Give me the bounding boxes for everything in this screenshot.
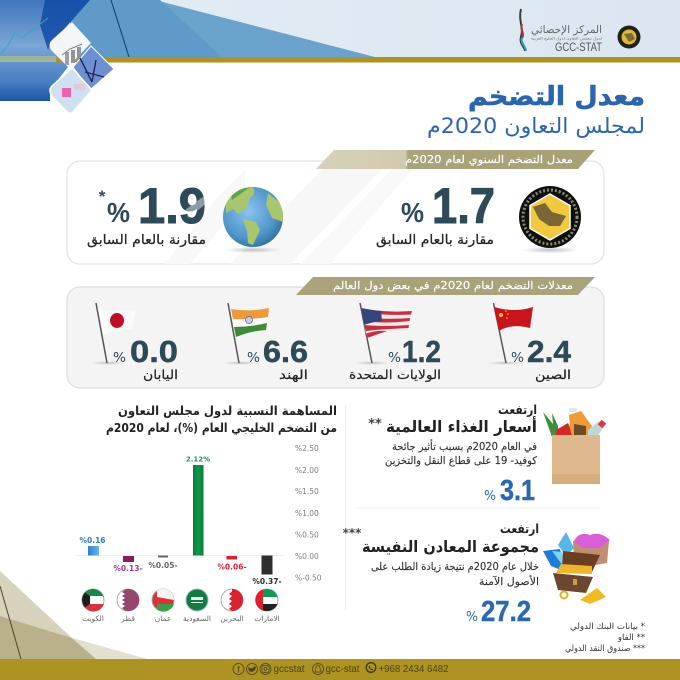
USA name: الولايات المتحدة bbox=[349, 367, 441, 383]
icon: grocery bag bbox=[543, 408, 606, 484]
icon: facebook: f bbox=[237, 664, 240, 674]
food heading: أسعار الغذاء العالمية bbox=[386, 416, 537, 436]
icon: Japan flag bbox=[91, 303, 136, 365]
world value bbox=[87, 178, 207, 248]
ribbon text: معدل التضخم السنوي لعام 2020م bbox=[405, 154, 573, 166]
logo: GCC-STAT bbox=[520, 9, 603, 54]
food intro: ارتفعت bbox=[498, 402, 537, 417]
USA percent: % bbox=[388, 351, 401, 366]
metals asterisks: *** bbox=[343, 526, 362, 540]
y axis labels: %0.50 bbox=[295, 530, 319, 540]
icon: treasure chest bbox=[543, 532, 610, 604]
world caption: مقارنة بالعام السابق bbox=[87, 233, 206, 248]
China number: 2.4 bbox=[527, 334, 572, 369]
icon: whatsapp bbox=[366, 663, 376, 672]
logo subtitle: لدول مجلس التعاون لدول الخليج العربية bbox=[531, 36, 602, 40]
y axis labels: %2.50 bbox=[295, 444, 319, 453]
bar: UAE: %0.37- bbox=[252, 577, 282, 586]
icon: globe bbox=[223, 186, 283, 253]
India name: الهند bbox=[279, 367, 308, 383]
label Bahrain: البحرين bbox=[220, 614, 244, 623]
icon: facebook bbox=[233, 664, 244, 674]
logo name arabic: المركز الإحصائي bbox=[531, 24, 602, 36]
metals body line 1: خلال عام 2020م نتيجة زيادة الطلب على bbox=[371, 561, 539, 573]
metals number: 27.2 bbox=[481, 596, 531, 628]
Japan bbox=[91, 303, 178, 382]
bar: Oman: %0.05- bbox=[148, 561, 178, 570]
label Oman: عمان bbox=[155, 614, 171, 623]
GCC value bbox=[376, 178, 495, 248]
icon: snapchat bbox=[312, 664, 324, 674]
y axis labels: %1.00 bbox=[295, 509, 319, 518]
panel: world rates bbox=[67, 277, 604, 388]
chart title line 2: من التضخم الخليجي العام (%)، لعام 2020م bbox=[106, 420, 337, 436]
y axis labels bbox=[295, 444, 322, 582]
ribbon: world heading bbox=[296, 277, 595, 295]
logo latin name: GCC-STAT bbox=[555, 40, 603, 54]
bar: Oman bbox=[148, 556, 178, 570]
label Saudi: السعودية bbox=[183, 614, 211, 623]
bar: Bahrain: %0.06- bbox=[217, 562, 247, 572]
Japan percent: % bbox=[113, 351, 126, 366]
y axis labels: %-0.50 bbox=[295, 574, 322, 582]
panel: annual inflation bbox=[67, 150, 604, 264]
header banner bbox=[0, 0, 680, 101]
GCC percent: % bbox=[401, 197, 424, 228]
y axis labels: %2.00 bbox=[295, 466, 319, 475]
header diamond tiles bbox=[50, 22, 114, 113]
metals heading: مجموعة المعادن النفيسة bbox=[362, 537, 539, 556]
icon: twitter bbox=[246, 664, 258, 674]
footnotes bbox=[565, 622, 645, 654]
icon: USA flag bbox=[355, 303, 412, 365]
world number: 1.9 bbox=[138, 178, 206, 234]
footer bar bbox=[0, 659, 680, 680]
metals percent: % bbox=[466, 610, 478, 625]
handle gcc-stat: gcc-stat bbox=[326, 664, 360, 675]
flag: Qatar bbox=[117, 589, 139, 623]
USA number: 1.2 bbox=[402, 334, 441, 369]
decorative corner bbox=[0, 571, 147, 659]
flag: UAE bbox=[254, 589, 280, 623]
bar: Qatar: %0.13- bbox=[113, 564, 143, 573]
bar: Bahrain bbox=[217, 556, 247, 572]
flag: Saudi Arabia bbox=[183, 589, 211, 623]
bar: Kuwait bbox=[79, 536, 106, 556]
food number: 3.1 bbox=[500, 475, 535, 507]
India bbox=[223, 303, 308, 383]
panel: precious metals bbox=[343, 521, 610, 628]
flag: Bahrain bbox=[220, 589, 244, 623]
flag: Kuwait bbox=[82, 589, 104, 623]
emblem: GCC small bbox=[618, 26, 640, 48]
China bbox=[488, 303, 572, 383]
label UAE: الامارات bbox=[254, 614, 280, 623]
food asterisks: ** bbox=[368, 417, 382, 432]
panel: food prices bbox=[368, 402, 606, 507]
icon: India flag bbox=[223, 303, 269, 365]
handle gccstat: gccstat bbox=[274, 664, 305, 675]
world percent: % bbox=[107, 197, 130, 228]
world asterisk: * bbox=[99, 187, 106, 206]
title bbox=[427, 82, 645, 138]
label Kuwait: الكويت bbox=[82, 614, 104, 623]
footnote IMF: *** صندوق النقد الدولي bbox=[565, 644, 645, 654]
bar: Saudi Arabia bbox=[186, 456, 210, 556]
bar: Kuwait: %0.16 bbox=[79, 536, 106, 545]
chart title bbox=[106, 403, 337, 436]
China name: الصين bbox=[535, 367, 571, 383]
footnote FAO: ** الفاو bbox=[617, 633, 645, 643]
GCC number: 1.7 bbox=[432, 178, 495, 234]
Japan number: 0.0 bbox=[130, 334, 178, 369]
icon: GCC emblem bbox=[519, 186, 581, 254]
y axis labels: %1.50 bbox=[295, 487, 319, 496]
India number: 6.6 bbox=[263, 334, 308, 369]
India percent: % bbox=[247, 351, 260, 366]
food body line 1: في العام 2020م بسبب تأثير جائحة bbox=[392, 439, 537, 453]
phone number: +968 2434 6482 bbox=[378, 664, 448, 675]
bar: Saudi Arabia: 2.12% bbox=[186, 456, 210, 464]
metals intro: ارتفعت bbox=[500, 521, 539, 536]
icon: instagram bbox=[260, 664, 271, 674]
metals body line 2: الأصول الآمنة bbox=[479, 575, 539, 588]
food percent: % bbox=[484, 489, 496, 504]
title line 2: لمجلس التعاون 2020م bbox=[427, 114, 645, 138]
gold header bar bbox=[56, 57, 680, 62]
title line 1: معدل التضخم bbox=[468, 82, 645, 112]
Japan name: اليابان bbox=[143, 367, 178, 382]
USA bbox=[349, 303, 441, 383]
food body line 2: كوفيد- 19 على قطاع النقل والتخزين bbox=[385, 455, 537, 467]
bar: Qatar bbox=[113, 556, 143, 573]
flag: Oman bbox=[152, 589, 174, 623]
bar: UAE bbox=[252, 556, 282, 586]
icon: China flag bbox=[488, 303, 533, 365]
y axis labels: %0.00 bbox=[295, 552, 319, 561]
footnote world bank: * بيانات البنك الدولي bbox=[570, 622, 645, 632]
chart title line 1: المساهمة النسبية لدول مجلس التعاون bbox=[118, 403, 337, 418]
label Qatar: قطر bbox=[120, 614, 135, 623]
chart: contribution to inflation bbox=[75, 403, 337, 623]
China percent: % bbox=[511, 351, 524, 366]
ribbon text: معدلات التضخم لعام 2020م في بعض دول العالم bbox=[333, 280, 573, 292]
GCC caption: مقارنة بالعام السابق bbox=[376, 233, 494, 248]
ribbon: annual heading bbox=[316, 150, 595, 169]
